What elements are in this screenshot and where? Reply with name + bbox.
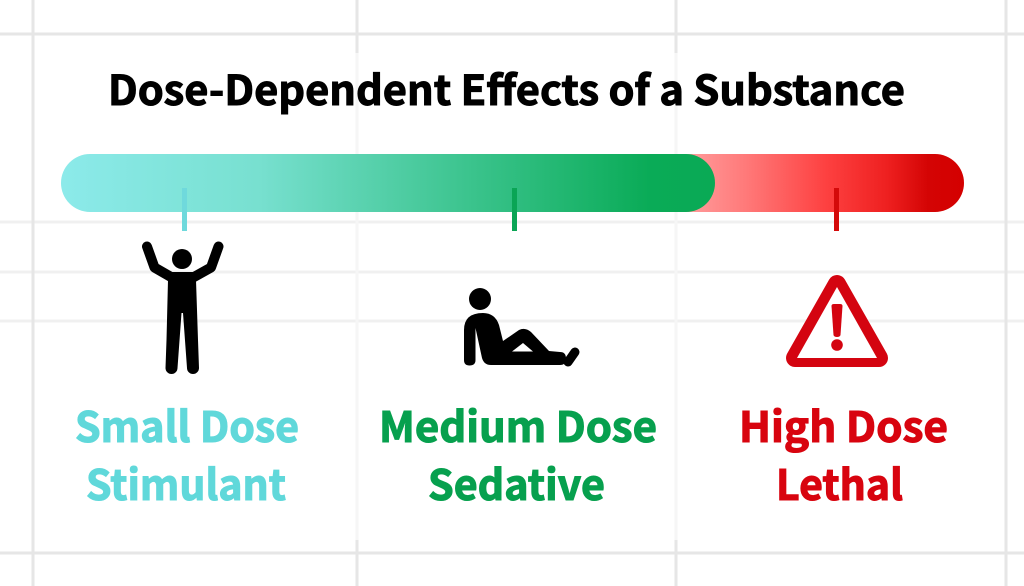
label: medium dose sedative: Sedative	[428, 452, 605, 513]
label: high dose lethal: Lethal	[776, 452, 903, 513]
tick: high dose	[834, 188, 839, 231]
tick: small dose	[182, 188, 187, 231]
title: Dose-Dependent Effects of a Substance	[108, 57, 905, 117]
label: small dose stimulant: Small Dose	[75, 394, 299, 455]
label: high dose lethal	[739, 394, 948, 513]
dose gradient bar	[61, 154, 964, 212]
icon: warning triangle	[795, 284, 879, 358]
label: small dose stimulant: Stimulant	[86, 452, 286, 513]
icon: standing person with raised arms	[147, 246, 218, 374]
tick: medium dose	[512, 188, 517, 231]
label: medium dose sedative: Medium Dose	[379, 394, 657, 455]
label: high dose lethal: High Dose	[739, 394, 948, 455]
label: medium dose sedative	[379, 394, 657, 513]
label: small dose stimulant	[75, 394, 299, 513]
icon: reclining person	[464, 288, 575, 366]
